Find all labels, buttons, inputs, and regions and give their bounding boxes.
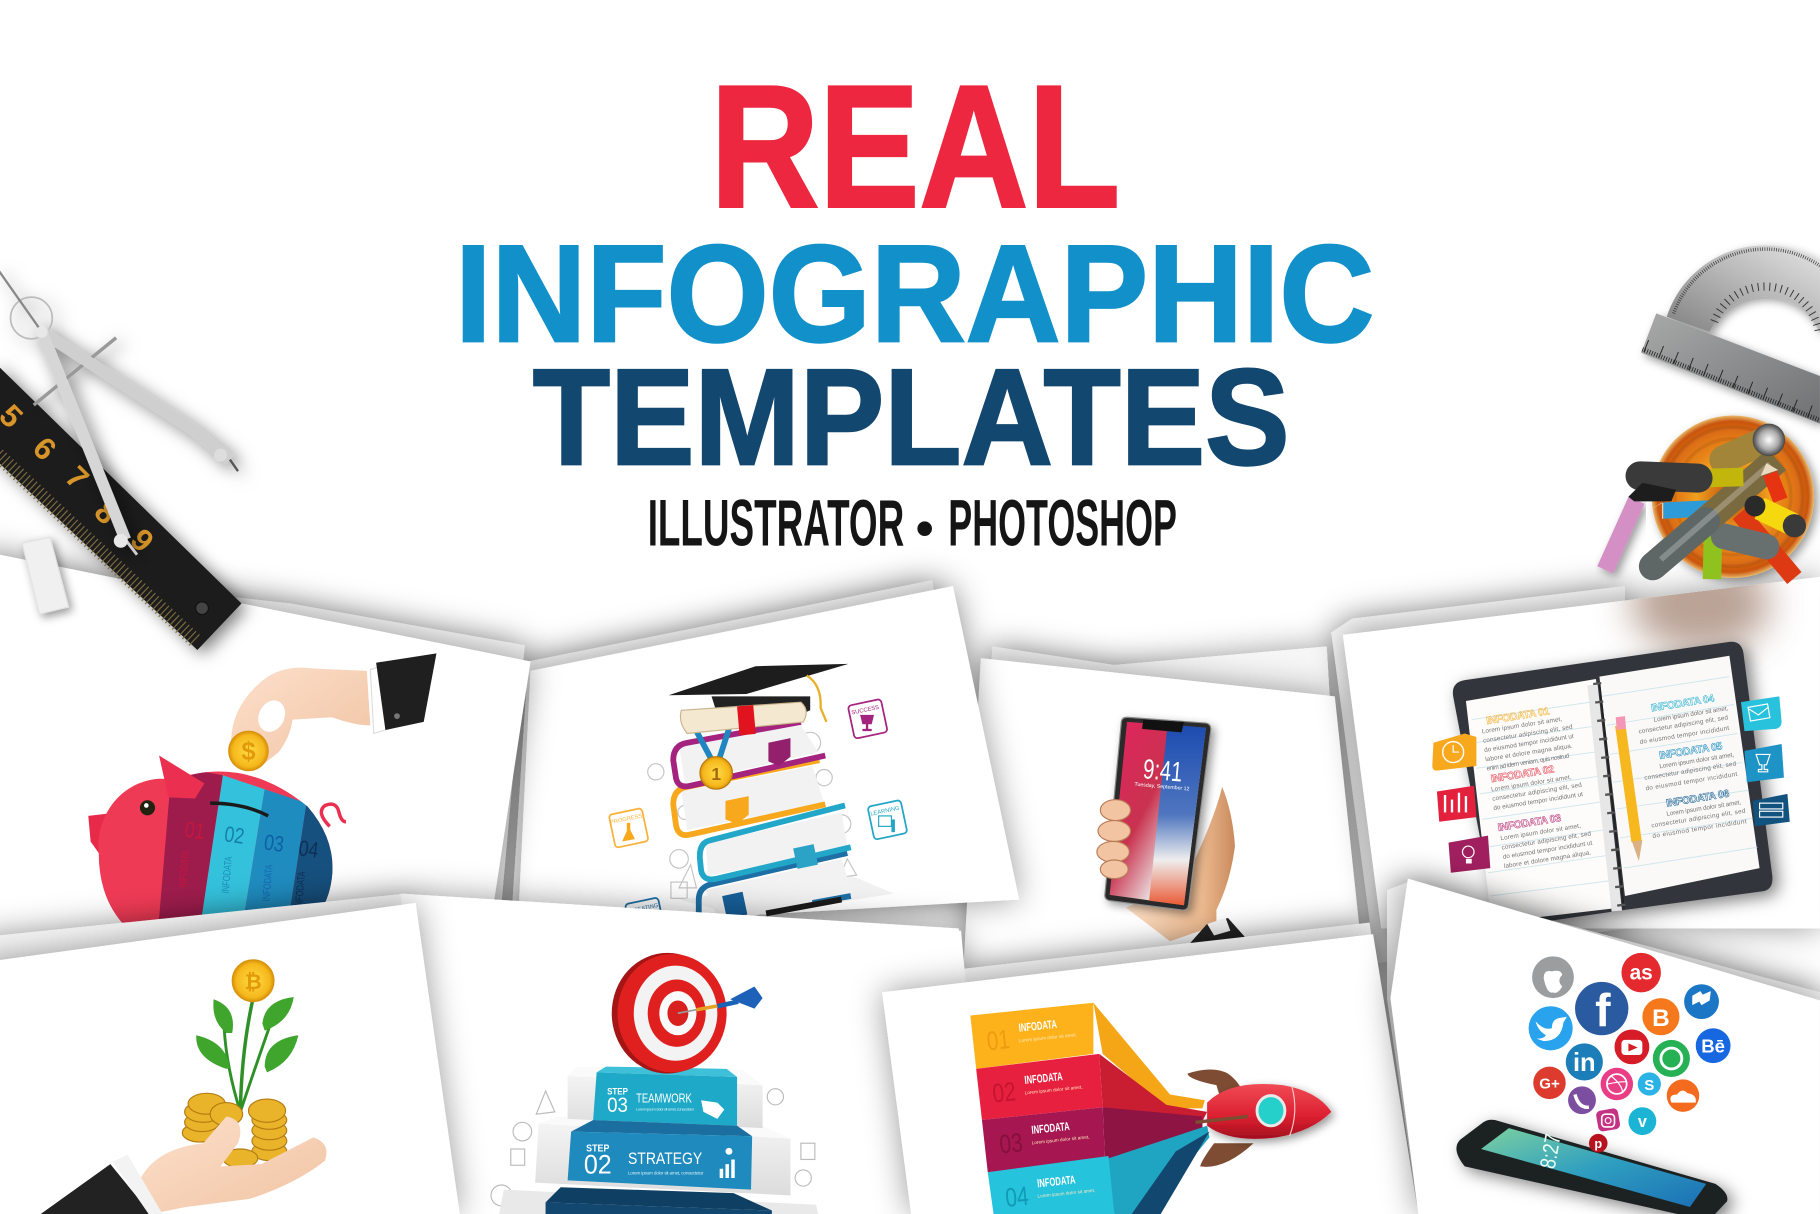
- icon: open notebook: do eiusmod tempor incididunt: [1645, 771, 1738, 792]
- icon: social media bubbles: p: [1594, 1136, 1602, 1151]
- icon: piggy bank: 04: [297, 835, 320, 863]
- icon: open notebook: Lorem ipsum dolor sit amet,: [1666, 799, 1742, 818]
- badge: creating: CREATING: [629, 903, 660, 915]
- icon: open notebook: do eiusmod tempor incididunt ut: [1493, 791, 1584, 812]
- chart: rocket ribbon diagram: Lorem ipsum dolor sit amet,: [1031, 1134, 1090, 1145]
- badge: learning: [868, 800, 907, 840]
- chart: rocket ribbon diagram: Lorem ipsum dolor sit amet,: [1024, 1084, 1083, 1095]
- icon: open notebook: Lorem ipsum dolor sit amet,: [1491, 774, 1572, 794]
- icon: open notebook: INFODATA 01: [1486, 706, 1551, 727]
- icon: coin plant in hand: ₿: [245, 971, 262, 994]
- subtitle: •: [916, 499, 934, 556]
- icon: open notebook: do eiusmod tempor incididunt ut: [1502, 840, 1593, 861]
- chart: rocket ribbon diagram: 04: [1004, 1181, 1030, 1213]
- icon: piggy bank: [88, 756, 346, 923]
- icon: black ruler: 8: [88, 494, 125, 531]
- tab: chart: [1437, 786, 1476, 822]
- heading: TEMPLATES: TEMPLATES: [533, 341, 1290, 494]
- icon: open notebook: do eiusmod tempor incididunt ut: [1484, 733, 1574, 754]
- badge: success: SUCCESS: [851, 705, 880, 716]
- badge: creating: [625, 897, 665, 937]
- icon: piggy bank: 03: [263, 829, 286, 857]
- icon: open notebook: Lorem ipsum dolor sit amet,: [1653, 705, 1729, 724]
- icon: compass: [0, 269, 238, 555]
- badge: learning: LEARNING: [870, 805, 901, 818]
- icon: protractor: [1641, 245, 1820, 424]
- icon: open notebook: consectetur adipiscing elit, sed: [1492, 782, 1583, 803]
- icon: social media bubbles: G+: [1539, 1076, 1560, 1093]
- icon: social media bubbles: B: [1652, 1005, 1670, 1032]
- panel: graduation sheet: [518, 586, 1019, 928]
- tab: mail: [1741, 696, 1782, 731]
- title: [455, 49, 1374, 560]
- subtitle: ILLUSTRATOR: [648, 486, 904, 560]
- chart: rocket ribbon diagram: [970, 1003, 1331, 1214]
- panel: target sheet: [420, 901, 987, 1214]
- icon: open notebook: consectetur adipiscing elit, sed: [1501, 830, 1592, 852]
- panel: notebook sheet: [1343, 577, 1820, 928]
- sheets behind bottom row: [0, 882, 1820, 1214]
- icon: open notebook: INFODATA 05: [1659, 741, 1723, 762]
- icon: piggy bank: INFODATA: [294, 871, 308, 909]
- chart: rocket ribbon diagram: Lorem ipsum dolor sit amet,: [1019, 1032, 1077, 1043]
- icon: open notebook: INFODATA 06: [1665, 789, 1730, 810]
- icon: phone in hand: 9:41: [1142, 753, 1184, 788]
- icon: smartphone lying flat: [1456, 1120, 1727, 1214]
- icon: black ruler: [0, 362, 241, 650]
- heading: INFOGRAPHIC: INFOGRAPHIC: [455, 217, 1374, 371]
- chart: rocket ribbon diagram: INFODATA: [1024, 1070, 1064, 1087]
- icon: social media bubbles: v: [1638, 1113, 1647, 1131]
- icon: piggy bank: 01: [183, 817, 206, 844]
- icon: open notebook: consectetur adipiscing elit, sed: [1644, 760, 1737, 782]
- icon: open notebook: Lorem ipsum dolor sit amet,: [1659, 752, 1735, 770]
- icon: open notebook: do eiusmod tempor incididunt: [1639, 725, 1730, 746]
- sheets behind top row: [0, 569, 1625, 975]
- tab: clock: [1432, 734, 1476, 771]
- icon: eraser: [22, 537, 69, 614]
- icon: target on stairs: Lorem ipsum dolor sit amet, consectetur: [636, 1107, 695, 1112]
- subtitle: PHOTOSHOP: [948, 486, 1177, 560]
- icon: social media bubbles: f: [1595, 984, 1611, 1036]
- icon: piggy bank: INFODATA: [261, 864, 276, 902]
- tab: trophy: [1744, 744, 1784, 782]
- icon: rocket: [1187, 1070, 1331, 1167]
- icon: black ruler: 9: [124, 522, 161, 559]
- icon: target on stairs: Lorem ipsum dolor sit amet, consectetur: [628, 1171, 704, 1176]
- heading: REAL: REAL: [710, 49, 1120, 244]
- icon: black ruler: 6: [26, 430, 63, 467]
- icon: social media bubbles: S: [1644, 1077, 1654, 1094]
- badge: success: [848, 699, 888, 739]
- icon: hand dropping coin: $: [241, 738, 256, 766]
- icon: open notebook: Lorem ipsum dolor sit amet,: [1481, 716, 1563, 735]
- icon: open notebook: INFODATA 02: [1490, 764, 1555, 785]
- icon: stack of books with graduation cap: 1: [711, 764, 721, 784]
- icon: social media bubbles: Bē: [1701, 1036, 1725, 1057]
- icon: piggy bank: INFODATA: [221, 856, 235, 894]
- panel: plant sheet: [0, 903, 460, 1214]
- tab: books: [1753, 794, 1790, 826]
- icon: open notebook: consectetur adipiscing elit, sed: [1638, 714, 1729, 735]
- icon: target on stairs: TEAMWORK: [636, 1091, 692, 1106]
- icon: social media bubbles: in: [1573, 1049, 1596, 1077]
- icon: black ruler: 7: [59, 459, 96, 496]
- icon: smartphone lying flat: 8:27: [1535, 1132, 1566, 1171]
- icon: social media bubbles: as: [1630, 962, 1653, 985]
- icon: phone in hand: Tuesday, September 12: [1134, 782, 1190, 792]
- icon: target on stairs: STEP: [586, 1143, 609, 1154]
- icon: open notebook: INFODATA 03: [1497, 813, 1562, 834]
- icon: open notebook: INFODATA 04: [1650, 694, 1715, 714]
- shadow of pencil cup: [1631, 555, 1770, 652]
- icon: open notebook: enim ad idem veniam, quis nostrud: [1486, 753, 1570, 773]
- badge: progress: [609, 808, 649, 848]
- tab: bulb: [1449, 836, 1490, 873]
- icon: open notebook: Lorem ipsum dolor sit amet,: [1500, 823, 1582, 842]
- icon: phone in hand: [1097, 717, 1248, 944]
- icon: open notebook: [1432, 642, 1790, 928]
- panel: social media sheet: [1390, 879, 1820, 1214]
- chart: rocket ribbon diagram: INFODATA: [1037, 1173, 1076, 1190]
- chart: rocket ribbon diagram: INFODATA: [1031, 1120, 1071, 1137]
- chart: rocket ribbon diagram: INFODATA: [1018, 1018, 1058, 1035]
- icon: hand dropping coin: [229, 653, 436, 771]
- chart: rocket ribbon diagram: Lorem ipsum dolor sit amet,: [1037, 1188, 1095, 1199]
- icon: target on stairs: 03: [607, 1094, 628, 1117]
- icon: open notebook: do eiusmod tempor incididunt: [1652, 818, 1747, 840]
- badge: progress: PROGRESS: [610, 813, 643, 826]
- icon: target on stairs: STRATEGY: [628, 1150, 702, 1168]
- icon: open notebook: consectetur adipiscing elit, sed: [1483, 724, 1574, 745]
- icon: coin plant in hand: [41, 960, 327, 1214]
- icon: open notebook: consectetur adipiscing elit, sed: [1651, 808, 1746, 829]
- icon: target on stairs: STEP: [607, 1086, 628, 1096]
- icon: piggy bank: INFODATA: [178, 850, 192, 888]
- chart: rocket ribbon diagram: 03: [998, 1127, 1024, 1160]
- panel: piggy bank sheet: [0, 550, 530, 940]
- icon: open notebook: labore et dolore magna aliqua.: [1503, 849, 1592, 870]
- icon: social media bubbles: [1529, 953, 1731, 1152]
- panel: rocket sheet: [882, 934, 1418, 1214]
- icon: stack of books with graduation cap: [609, 664, 907, 937]
- icon: pencil cup: [1605, 415, 1814, 579]
- icon: target on stairs: 02: [584, 1149, 612, 1179]
- panel: phone sheet: [963, 658, 1364, 969]
- icon: open notebook: labore et dolore magna aliqua.: [1485, 743, 1573, 763]
- icon: target on stairs: [491, 953, 818, 1214]
- chart: rocket ribbon diagram: 02: [991, 1076, 1017, 1109]
- icon: piggy bank: 02: [223, 821, 246, 849]
- chart: rocket ribbon diagram: 01: [985, 1024, 1011, 1056]
